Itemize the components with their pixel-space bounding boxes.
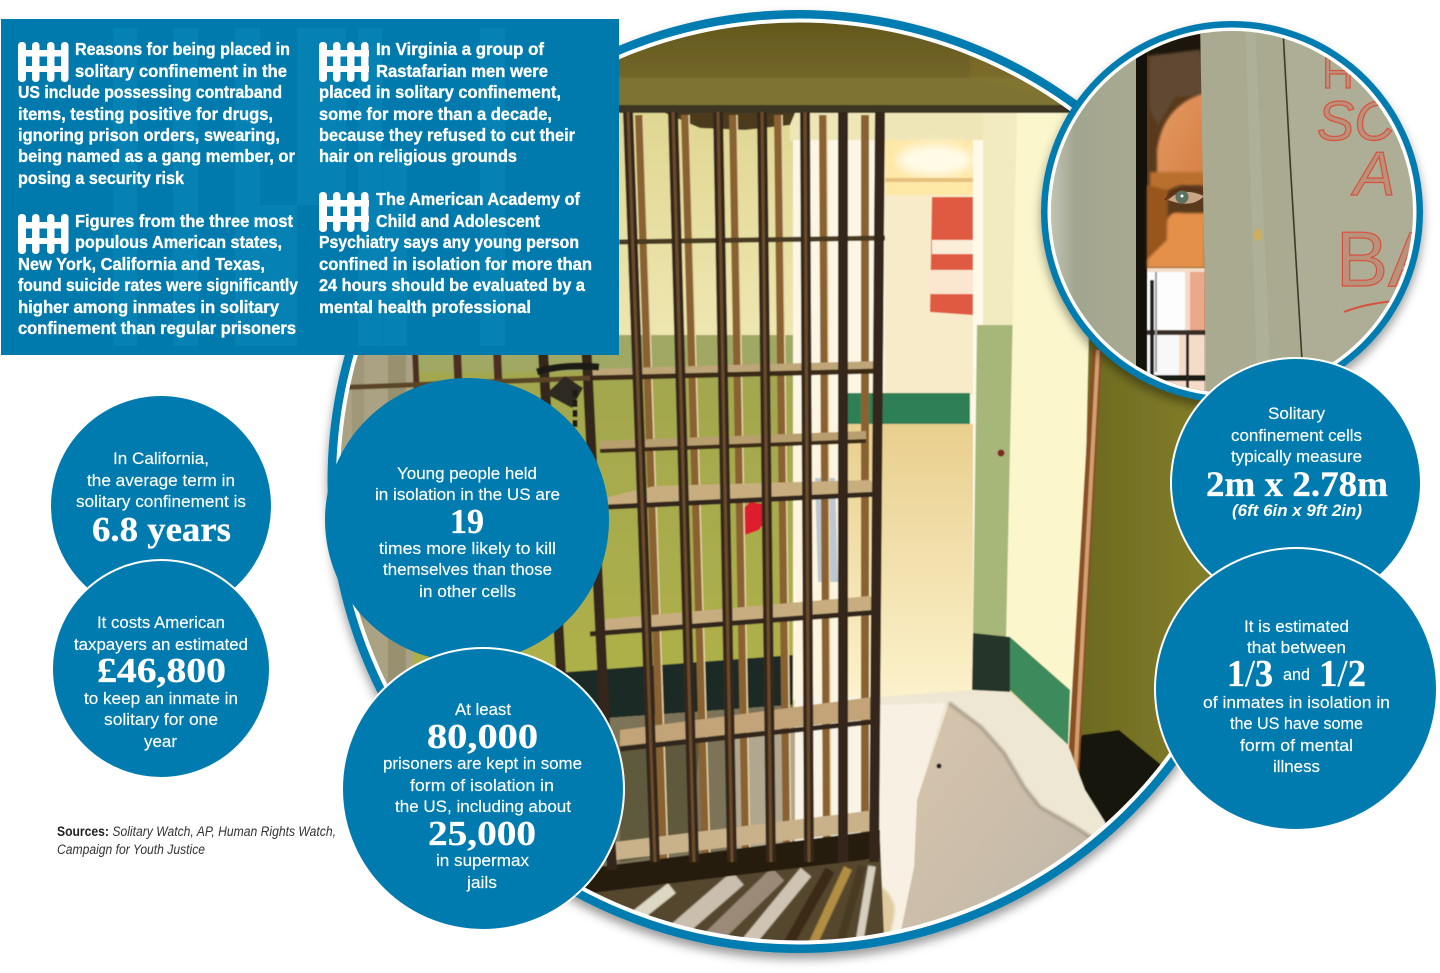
stat circle: inmates with mental illness: illness: [1273, 757, 1320, 776]
stat circle: cost to taxpayers: taxpayers an estimated: [74, 635, 248, 654]
fact: Rastafarian men in Virginia: In Virginia a group of: [376, 39, 544, 59]
small photo circle: man peering through cell door: [1040, 20, 1440, 420]
cell door gate: [330, 112, 885, 895]
stat circle: young people suicide risk: Young people held: [397, 464, 537, 483]
hair: [1146, 33, 1204, 124]
fact: Rastafarian men in Virginia: [319, 39, 575, 166]
room beyond the door: [790, 113, 985, 141]
right wall and post: [1080, 338, 1210, 765]
stat circle: young people suicide risk: [325, 378, 609, 662]
stat value: 2m x 2.78m: 2m x 2.78m: [1206, 464, 1388, 504]
red graffiti on the door: BA: [1336, 215, 1440, 303]
stat circle: prisoners in isolation: prisoners are kept in some: [383, 754, 582, 773]
fact: Rastafarian men in Virginia: placed in solitary confinement,: [319, 82, 561, 102]
stat circle: young people suicide risk: in isolation in the US are: [375, 485, 560, 504]
stat circle: cell size: confinement cells: [1231, 426, 1362, 445]
fact: American Academy of Child and Adolescent Psychiatry: confined in isolation for more than: [319, 254, 592, 274]
stat circle: cost to taxpayers: year: [144, 732, 177, 751]
stat circle: inmates with mental illness: form of mental: [1240, 736, 1353, 755]
fact: suicide rates in three most populous states: [18, 211, 298, 338]
main photo circle: open prison cell door: [328, 0, 1290, 973]
fact: Rastafarian men in Virginia: Rastafarian men were: [376, 61, 548, 81]
fact: reasons for being placed in solitary: posing a security risk: [18, 168, 184, 188]
fact: American Academy of Child and Adolescent Psychiatry: [319, 189, 592, 317]
stat circle: inmates with mental illness: and: [1283, 665, 1310, 684]
stat circle: cell size: (6ft 6in x 9ft 2in): [1232, 501, 1362, 520]
stat circle: young people suicide risk: in other cells: [419, 582, 516, 601]
fact: suicide rates in three most populous states: higher among inmates in solitary: [18, 297, 279, 317]
fact: reasons for being placed in solitary: items, testing positive for drugs,: [18, 104, 273, 124]
fact: Rastafarian men in Virginia: because they refused to cut their: [319, 125, 575, 145]
red graffiti on the door: SC: [1317, 89, 1395, 152]
fact: American Academy of Child and Adolescent Psychiatry: The American Academy of: [376, 189, 580, 209]
fact: American Academy of Child and Adolescent Psychiatry: Psychiatry says any young person: [319, 232, 579, 252]
stat value: £46,800: £46,800: [97, 651, 226, 690]
stat circle: average term in California: solitary confinement is: [76, 492, 246, 511]
door frame: [973, 140, 983, 640]
stat circle: average term in California: [51, 396, 271, 616]
icon: prison fence: [319, 192, 369, 232]
stat value: 19: 19: [450, 502, 484, 541]
stat circle: young people suicide risk: themselves than those: [383, 560, 552, 579]
ribbed floor: [594, 841, 884, 940]
fact: American Academy of Child and Adolescent Psychiatry: 24 hours should be evaluated by a: [319, 275, 585, 295]
fact: Rastafarian men in Virginia: hair on religious grounds: [319, 146, 517, 166]
stat circle: prisoners in isolation: jails: [466, 873, 497, 892]
stat circle: prisoners in isolation: At least: [455, 700, 511, 719]
fact: reasons for being placed in solitary: Reasons for being placed in: [75, 39, 290, 59]
fact: suicide rates in three most populous states: found suicide rates were significantly: [18, 275, 298, 295]
stat circle: prisoners in isolation: form of isolation in: [410, 776, 554, 795]
stat circle: average term in California: In California,: [113, 449, 209, 468]
stat circle: inmates with mental illness: It is estimated: [1244, 617, 1349, 636]
stat circle: prisoners in isolation: the US, including about: [395, 797, 571, 816]
fact: reasons for being placed in solitary: [18, 39, 295, 188]
fact: American Academy of Child and Adolescent Psychiatry: mental health professional: [319, 297, 531, 317]
watermark bars: [113, 28, 505, 346]
sources note: Campaign for Youth Justice: [57, 842, 205, 857]
stat value: 6.8 years: 6.8 years: [92, 510, 231, 549]
red graffiti on the door: [1318, 57, 1412, 313]
stat circle: prisoners in isolation: in supermax: [436, 851, 529, 870]
fact: reasons for being placed in solitary: ignoring prison orders, swearing,: [18, 125, 280, 145]
stat circle: young people suicide risk: times more likely to kill: [379, 539, 556, 558]
stat circle: cost to taxpayers: It costs American: [97, 613, 225, 632]
fact: suicide rates in three most populous states: Figures from the three most: [75, 211, 293, 231]
stat circle: average term in California: the average term in: [87, 471, 235, 490]
face: [1147, 93, 1205, 268]
icon: prison fence: [319, 42, 369, 82]
window reflection: [1147, 268, 1205, 403]
fact: American Academy of Child and Adolescent Psychiatry: Child and Adolescent: [376, 211, 540, 231]
fact: suicide rates in three most populous states: New York, California and Texas,: [18, 254, 265, 274]
stat value: 25,000: 25,000: [428, 814, 536, 853]
stat circle: inmates with mental illness: that between: [1247, 638, 1346, 657]
stat circle: prisoners in isolation: [342, 648, 624, 930]
stat circle: inmates with mental illness: the US have some: [1230, 714, 1363, 733]
stat circle: inmates with mental illness: of inmates in isolation in: [1203, 693, 1390, 712]
icon: prison fence: [18, 42, 68, 82]
fact: reasons for being placed in solitary: being named as a gang member, or: [18, 146, 295, 166]
stat value: 80,000: 80,000: [427, 717, 538, 756]
stat circle: inmates with mental illness: [1155, 548, 1437, 830]
icon: prison fence: [18, 214, 68, 254]
stat circle: cell size: Solitary: [1268, 404, 1326, 423]
padlock and chain: [537, 366, 599, 430]
stat value: 1/3: 1/3: [1227, 653, 1273, 695]
stat value: 1/2: 1/2: [1319, 653, 1366, 695]
sources note: Sources: Solitary Watch, AP, Human Rights Watch,: [57, 824, 336, 839]
fact: Rastafarian men in Virginia: some for more than a decade,: [319, 104, 552, 124]
eye: [1165, 188, 1204, 204]
sources note: [57, 824, 336, 857]
fact: reasons for being placed in solitary: solitary confinement in the: [75, 61, 287, 81]
red graffiti on the door: A: [1350, 140, 1395, 209]
red graffiti on the door: H: [1322, 49, 1354, 98]
text panel: facts about solitary confinement: [1, 19, 619, 355]
stat circle: cost to taxpayers: to keep an inmate in: [84, 689, 238, 708]
fact: reasons for being placed in solitary: US include possessing contraband: [18, 82, 282, 102]
fact: suicide rates in three most populous states: confinement than regular prisoners: [18, 318, 296, 338]
stat circle: cost to taxpayers: [52, 560, 270, 778]
stat circle: cell size: typically measure: [1231, 447, 1362, 466]
concrete floor: [880, 689, 1106, 837]
fact: suicide rates in three most populous states: populous American states,: [75, 232, 282, 252]
stat circle: cost to taxpayers: solitary for one: [104, 710, 218, 729]
stat circle: cell size: [1171, 358, 1421, 608]
